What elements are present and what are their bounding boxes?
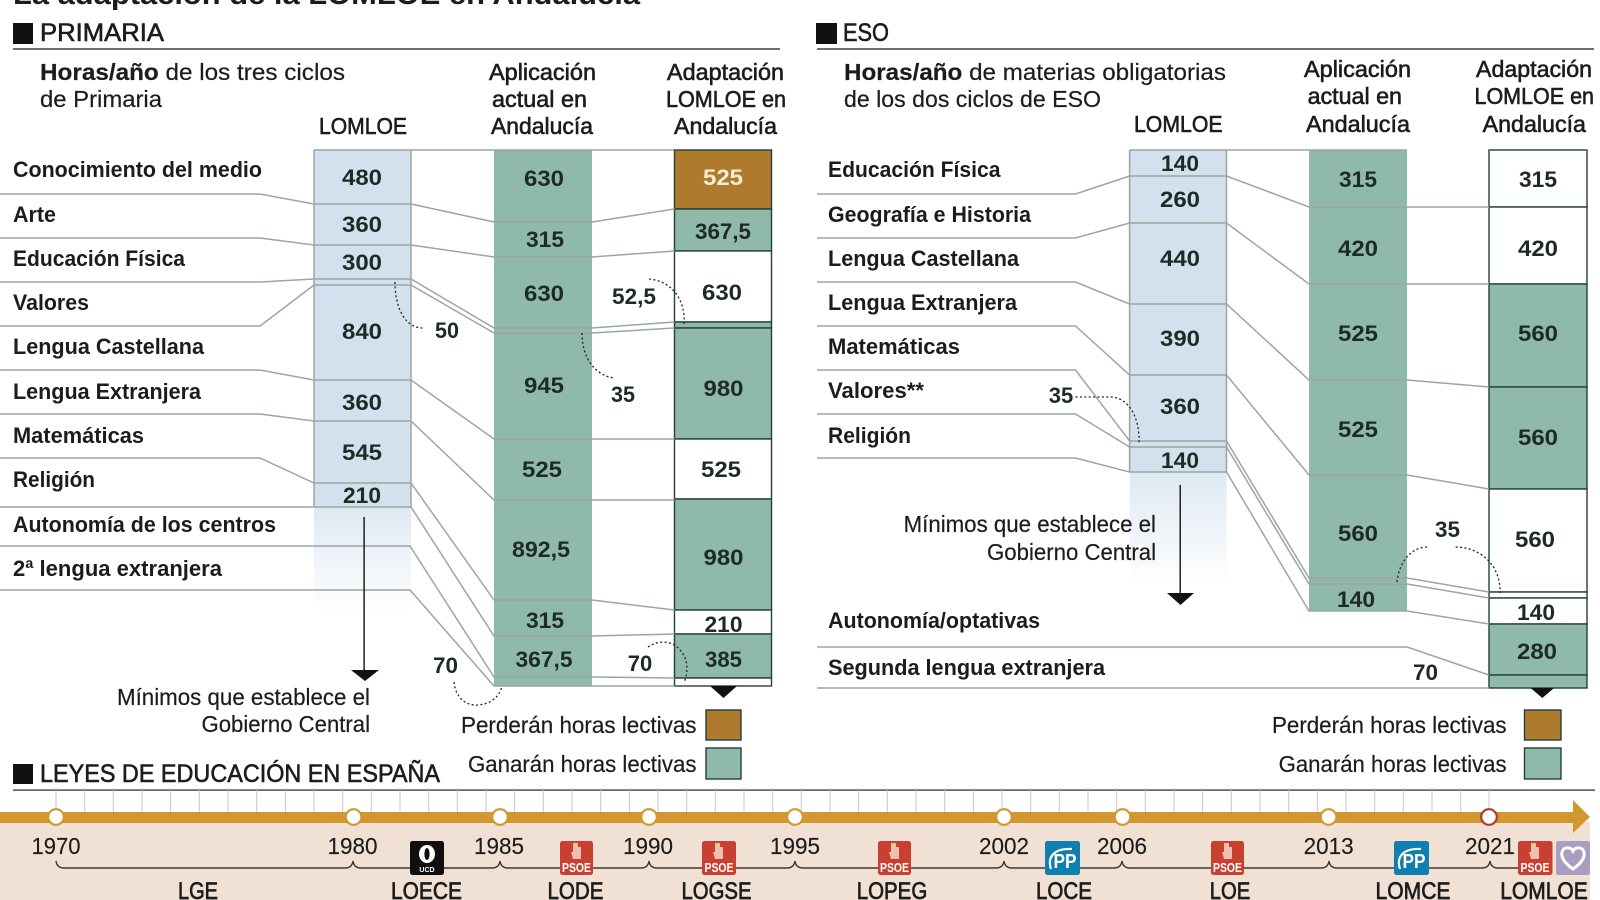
subtitle: ESO hours per year (844, 59, 1226, 112)
annotation: 70 left: 70 (433, 653, 458, 678)
badge: PSOE LOE (1211, 841, 1244, 875)
column header: LOMLOE adaptation: LOMLOE en (666, 86, 786, 112)
subject labels: Lengua Extranjera (13, 379, 201, 404)
subject labels ESO: Valores** (828, 378, 924, 403)
badge: Podemos heart (1556, 841, 1590, 875)
values: LOMLOE primaria: 300 (342, 250, 382, 275)
subject labels ESO: Educación Física (828, 157, 1001, 182)
annotation: 70: 70 (1413, 660, 1438, 685)
column header: current application: actual en (492, 86, 587, 112)
values: current application ESO: 140 (1337, 587, 1375, 612)
column: LOMLOE ESO (1130, 150, 1227, 587)
values: current application ESO: 560 (1338, 521, 1378, 546)
badge: PSOE LOGSE: PSOE (704, 860, 734, 875)
annotation: 35 right (1397, 517, 1500, 593)
subject labels ESO (828, 157, 1105, 680)
values: current application primaria: 630 (524, 166, 564, 191)
year labels: 1985 (474, 833, 524, 859)
annotation: 50: 50 (435, 318, 459, 343)
note: government minimums: Mínimos que establece el (117, 684, 370, 710)
heading: primaria: PRIMARIA (40, 19, 164, 47)
legend ESO: Ganarán horas lectivas (1279, 751, 1507, 777)
badge: PSOE LOPEG: PSOE (880, 860, 909, 875)
arrow: government minimums (351, 517, 379, 681)
column header: LOMLOE ESO: LOMLOE (1134, 111, 1222, 137)
timeline band (0, 822, 1590, 900)
column header: current application ESO: actual en (1308, 83, 1402, 109)
badge: PSOE LODE (560, 841, 593, 875)
subject labels: Matemáticas (13, 423, 144, 448)
subject labels ESO: Geografía e Historia (828, 202, 1031, 227)
values: adaptation ESO: 140 (1517, 600, 1555, 625)
heading: ESO: ESO (843, 19, 889, 47)
subject labels ESO: Lengua Castellana (828, 246, 1019, 271)
legend ESO (1272, 710, 1561, 779)
values: LOMLOE ESO (1160, 151, 1200, 473)
connector lines primaria (0, 150, 674, 686)
subtitle: hours per year (40, 59, 345, 112)
badge: PSOE LOE: PSOE (1213, 860, 1242, 875)
arrow: timeline bar (0, 800, 1590, 833)
legend primaria: Perderán horas lectivas (461, 712, 696, 738)
column header: adaptation ESO: Andalucía (1483, 111, 1586, 137)
subject labels: Religión (13, 467, 95, 492)
panel: ESO (816, 19, 1594, 779)
panel: education laws timeline (0, 759, 1595, 900)
badge: PSOE LOMLOE (1518, 841, 1552, 875)
values: LOMLOE primaria: 545 (342, 440, 382, 465)
annotation: 52,5 (612, 279, 684, 325)
values: adaptation primaria: 630 (702, 280, 742, 305)
badge: PP LOCE: PP (1054, 851, 1076, 873)
arrow: adaptation column ESO (1531, 688, 1554, 698)
values: current application primaria: 892,5 (512, 537, 570, 562)
values: adaptation primaria (695, 165, 751, 672)
values: current application primaria: 315 (526, 227, 564, 252)
year labels: 2002 (979, 833, 1029, 859)
column: adaptation primaria (674, 150, 772, 686)
heading: ESO (816, 19, 889, 47)
annotation: 52,5: 52,5 (612, 284, 656, 309)
annotation: 35 left (1049, 383, 1139, 443)
badge: UCD (410, 841, 444, 875)
subject labels: Arte (13, 202, 56, 227)
column header: adaptation ESO (1474, 56, 1594, 137)
column header: adaptation ESO: Adaptación (1476, 56, 1592, 82)
column header: current application (489, 59, 596, 139)
column: adaptation ESO (1489, 150, 1587, 688)
annotation: 70 middle (628, 642, 687, 683)
annotation: 35 (582, 333, 635, 407)
subtitle: ESO hours per year: Horas/año de materias obligatorias (844, 59, 1226, 85)
column header: current application ESO (1304, 56, 1411, 137)
values: current application primaria: 945 (524, 373, 564, 398)
year labels: 1995 (770, 833, 820, 859)
subject labels: Conocimiento del medio (13, 157, 262, 182)
subject labels ESO: Segunda lengua extranjera (828, 655, 1105, 680)
values: adaptation ESO: 315 (1519, 167, 1557, 192)
annotation: 35: 35 (611, 382, 635, 407)
column header: adaptation ESO: LOMLOE en (1474, 83, 1594, 109)
connector lines ESO (817, 150, 1489, 688)
values: adaptation ESO: 560 (1518, 425, 1558, 450)
values: LOMLOE primaria: 360 (342, 390, 382, 415)
badge: PP LOMCE (1394, 841, 1429, 875)
values: LOMLOE ESO: 440 (1160, 246, 1200, 271)
column header: LOMLOE adaptation: Adaptación (667, 59, 784, 85)
column header: current application: Andalucía (491, 113, 593, 139)
law names (178, 878, 1588, 900)
badge: PP LOCE (1045, 841, 1080, 875)
values: current application primaria: 630 (524, 281, 564, 306)
subject labels ESO: Matemáticas (828, 334, 960, 359)
subtitle: ESO hours per year: de los dos ciclos de ESO (844, 86, 1101, 112)
arrow: government minimums ESO (1167, 485, 1194, 605)
heading: education laws: LEYES DE EDUCACIÓN EN ESPAÑA (40, 759, 440, 788)
column header: LOMLOE adaptation: Andalucía (674, 113, 777, 139)
year labels: 2006 (1097, 833, 1147, 859)
values: adaptation ESO: 560 (1515, 527, 1555, 552)
note: government minimums (117, 684, 370, 737)
annotation: 50 (395, 282, 459, 343)
badge: PSOE LOGSE (702, 841, 736, 875)
subject labels ESO: Religión (828, 423, 911, 448)
year labels: 2013 (1304, 833, 1354, 859)
values: adaptation primaria: 210 (704, 612, 742, 637)
note: government minimums: Gobierno Central (202, 711, 370, 737)
timeline markers (48, 809, 1497, 825)
values: adaptation ESO: 280 (1517, 639, 1557, 664)
annotation: 35 right: 35 (1435, 517, 1460, 542)
values: LOMLOE ESO: 260 (1160, 187, 1200, 212)
values: adaptation primaria: 525 (701, 457, 741, 482)
values: LOMLOE primaria: 360 (342, 212, 382, 237)
values: current application ESO (1337, 167, 1378, 612)
values: adaptation primaria: 980 (704, 376, 744, 401)
values: current application ESO: 315 (1339, 167, 1377, 192)
badge: PP LOMCE: PP (1402, 851, 1426, 873)
year labels: 2021 (1465, 833, 1515, 859)
badge: UCD: UCD (419, 867, 435, 874)
column: LOMLOE primaria (314, 150, 411, 612)
subtitle: hours per year: de Primaria (40, 86, 162, 112)
values: adaptation primaria: 525 (703, 165, 743, 190)
badge: PSOE LOPEG (878, 841, 911, 875)
legend primaria (461, 710, 741, 779)
subject labels: Valores (13, 290, 89, 315)
subtitle: hours per year: Horas/año de los tres ciclos (40, 59, 345, 85)
values: current application primaria: 525 (522, 457, 562, 482)
values: LOMLOE ESO: 360 (1160, 394, 1200, 419)
subject labels ESO: Lengua Extranjera (828, 290, 1017, 315)
subject labels ESO: Autonomía/optativas (828, 608, 1040, 633)
column header: LOMLOE: LOMLOE (319, 113, 407, 139)
values: current application ESO: 420 (1338, 236, 1378, 261)
values: current application ESO: 525 (1338, 321, 1378, 346)
subject labels: Lengua Castellana (13, 334, 204, 359)
values: current application primaria (512, 166, 572, 672)
values: adaptation ESO (1515, 167, 1558, 664)
values: adaptation primaria: 385 (705, 647, 742, 672)
values: LOMLOE ESO: 390 (1160, 326, 1200, 351)
panel: primaria (0, 19, 786, 779)
legend ESO: Perderán horas lectivas (1272, 712, 1507, 738)
values: LOMLOE primaria: 480 (342, 165, 382, 190)
values: adaptation primaria: 980 (704, 545, 744, 570)
values: LOMLOE ESO: 140 (1161, 151, 1199, 176)
annotation: 35 left: 35 (1049, 383, 1073, 408)
annotation: 70 middle: 70 (628, 651, 652, 676)
column header: LOMLOE adaptation (666, 59, 786, 139)
arrow: adaptation column (710, 686, 737, 698)
column: current application primaria (494, 150, 592, 686)
note: government minimums ESO: Mínimos que establece el (904, 511, 1156, 537)
column header: current application: Aplicación (489, 59, 596, 85)
values: current application primaria: 315 (526, 608, 564, 633)
values: LOMLOE primaria: 210 (343, 483, 381, 508)
year labels (32, 833, 1515, 859)
year labels: 1990 (623, 833, 673, 859)
values: LOMLOE primaria (342, 165, 382, 508)
note: government minimums ESO: Gobierno Central (987, 539, 1156, 565)
subject labels: Autonomía de los centros (13, 512, 276, 537)
subject labels (13, 157, 276, 581)
values: adaptation ESO: 560 (1518, 321, 1558, 346)
column: current application ESO (1309, 150, 1407, 611)
values: adaptation ESO: 420 (1518, 236, 1558, 261)
values: current application primaria: 367,5 (516, 647, 572, 672)
values: adaptation primaria: 367,5 (695, 219, 751, 244)
values: LOMLOE ESO: 140 (1161, 448, 1199, 473)
values: LOMLOE primaria: 840 (342, 319, 382, 344)
year labels: 1970 (32, 833, 80, 859)
year labels: 1980 (328, 833, 378, 859)
column header: current application ESO: Aplicación (1304, 56, 1411, 82)
subject labels: 2ª lengua extranjera (13, 556, 222, 581)
values: current application ESO: 525 (1338, 417, 1378, 442)
badge: PSOE LODE: PSOE (562, 860, 591, 875)
column header: current application ESO: Andalucía (1306, 111, 1410, 137)
note: government minimums ESO (904, 511, 1156, 565)
annotation: 70 left (433, 653, 502, 705)
subject labels: Educación Física (13, 246, 185, 271)
legend primaria: Ganarán horas lectivas (468, 751, 696, 777)
badge: PSOE LOMLOE: PSOE (1520, 860, 1550, 875)
